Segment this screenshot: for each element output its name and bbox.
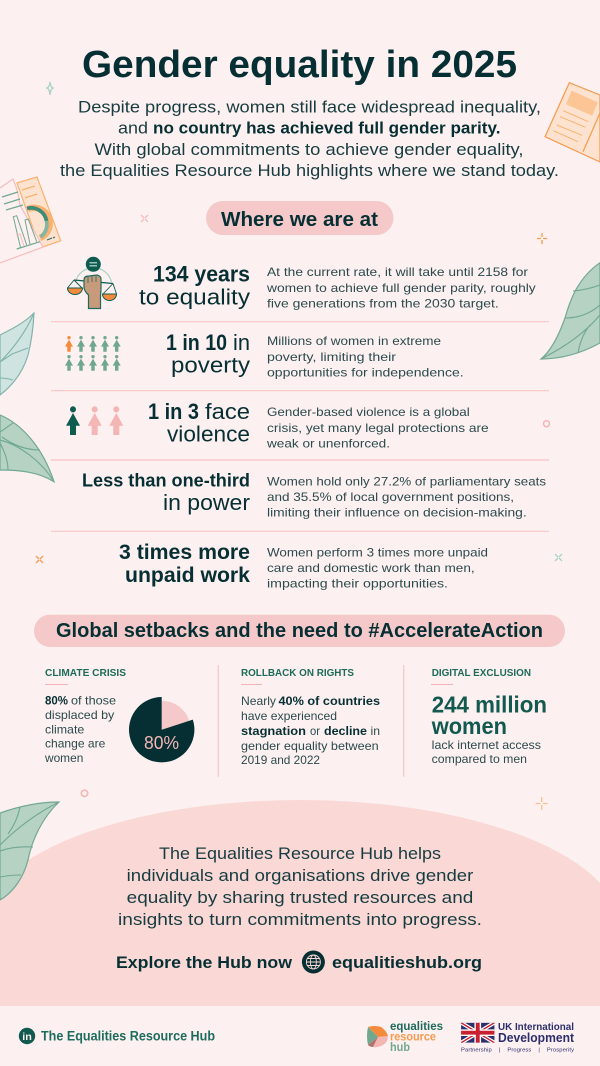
panel: 134 years <box>68 257 536 311</box>
intro text <box>60 97 559 180</box>
logo: UK International Development: Partnership | Progress | Prosperity <box>461 1048 574 1054</box>
panel: digital exclusion <box>431 667 547 766</box>
description: Women hold only 27.2% of parliamentary seats <box>267 474 546 488</box>
description <box>267 545 488 591</box>
text block: stagnation <box>241 724 306 738</box>
stat text: in <box>233 330 250 355</box>
description: impacting their opportunities. <box>267 577 448 591</box>
big number: 244 million <box>432 691 547 717</box>
description: opportunities for independence. <box>267 366 464 380</box>
text block: change are <box>45 737 106 751</box>
pie chart: 80%: 80% <box>144 733 179 753</box>
description: Millions of women in extreme <box>267 334 441 348</box>
text block <box>44 694 116 765</box>
illustration: green leaf left <box>0 415 54 482</box>
big number <box>431 691 547 739</box>
description: At the current rate, it will take until 2158 for <box>267 265 528 279</box>
big number: women <box>431 713 507 739</box>
stat text: violence <box>167 422 250 447</box>
stat text: 3 times more <box>119 541 250 564</box>
description: weak or unenforced. <box>266 437 390 451</box>
illustration: green leaf right <box>541 263 600 359</box>
description: five generations from the 2030 target. <box>267 297 499 311</box>
text block: in <box>370 724 380 738</box>
intro text: With global commitments to achieve gender equality, <box>94 140 524 159</box>
illustration: open report <box>545 83 600 162</box>
icon: scales and fist <box>68 257 116 308</box>
text block: displaced by <box>45 708 114 722</box>
description: crisis, yet many legal protections are <box>267 421 489 435</box>
text block: decline <box>324 724 367 738</box>
explore the hub link <box>116 950 482 974</box>
text block: gender equality between <box>241 739 379 753</box>
text block: 40% of countries <box>278 694 380 708</box>
text block: or <box>310 724 320 738</box>
text block: have experienced <box>241 709 337 723</box>
logo: equalities resource hub <box>367 1021 443 1054</box>
intro text: the Equalities Resource Hub highlights where we stand today. <box>60 161 559 180</box>
column heading: DIGITAL EXCLUSION <box>432 667 531 679</box>
stat text: face <box>205 399 250 424</box>
text block: 2019 and 2022 <box>241 753 320 767</box>
explore the hub link: equalitieshub.org <box>332 953 482 972</box>
text block: lack internet access <box>432 738 541 752</box>
stat text <box>82 470 250 515</box>
heading: where we are at <box>206 201 394 235</box>
stat text: 1 in 3 <box>148 399 199 424</box>
description: poverty, limiting their <box>267 350 396 364</box>
description: women to achieve full gender parity, roughly <box>266 281 536 295</box>
panel: 1 in 3 face violence <box>66 399 489 451</box>
text block <box>241 694 380 767</box>
stat text: 134 years <box>153 262 250 287</box>
illustration: pale leaf left <box>0 313 34 395</box>
column heading: ROLLBACK ON RIGHTS <box>241 667 354 679</box>
stat text: poverty <box>171 353 250 378</box>
title: Gender equality in 2025 <box>82 44 517 86</box>
icon: union flag <box>461 1022 494 1043</box>
decorative sparkles <box>36 82 562 810</box>
text block: Nearly <box>241 694 276 708</box>
description: care and domestic work than men, <box>267 561 475 575</box>
call-to-action text: insights to turn commitments into progress. <box>118 910 482 929</box>
panel: 134 years: to equality <box>139 284 250 310</box>
logo: equalities resource hub: resource <box>390 1032 436 1044</box>
description <box>267 474 546 520</box>
call-to-action text <box>118 844 482 929</box>
description <box>267 334 464 380</box>
illustration: green leaf bottom left <box>0 802 59 900</box>
description: limiting their influence on decision-making. <box>267 506 527 520</box>
icon: ten women, one highlighted <box>65 336 121 371</box>
heading: global setbacks <box>34 615 565 647</box>
intro text: no country has achieved full gender parity. <box>153 119 500 138</box>
stat text: unpaid work <box>125 564 250 587</box>
description <box>266 405 489 451</box>
icon: globe <box>302 950 325 974</box>
description <box>266 265 536 311</box>
panel: climate crisis <box>44 667 194 765</box>
footer: linkedin: The Equalities Resource Hub <box>41 1029 215 1044</box>
illustration: chart document <box>0 177 61 263</box>
stat text: Less than one-third <box>82 470 250 491</box>
bottom call-to-action background <box>0 800 600 1006</box>
footer: linkedin: in <box>22 1032 32 1043</box>
column heading: CLIMATE CRISIS <box>45 667 126 679</box>
icon: three women, one highlighted <box>66 406 123 435</box>
text block: of those <box>71 694 116 708</box>
call-to-action text: individuals and organisations drive gender <box>127 866 474 885</box>
text block: climate <box>45 722 85 736</box>
logo: equalities resource hub: hub <box>390 1042 410 1054</box>
explore the hub link: Explore the Hub now <box>116 953 293 972</box>
description: Women perform 3 times more unpaid <box>267 545 488 559</box>
heading: where we are at: Where we are at <box>221 209 378 231</box>
call-to-action text: The Equalities Resource Hub helps <box>159 844 441 863</box>
stat text: in power <box>163 490 250 515</box>
description: and 35.5% of local government positions, <box>267 490 514 504</box>
stat text <box>148 399 250 447</box>
stat text: 1 in 10 <box>166 330 227 355</box>
pie chart: 80% <box>129 697 194 762</box>
text block: compared to men <box>432 752 527 766</box>
stat text <box>166 330 250 378</box>
panel: 3 times more unpaid work <box>119 541 488 591</box>
stat text <box>119 541 250 587</box>
panel: less than one-third in power <box>82 470 546 520</box>
heading: global setbacks: Global setbacks and the need to #AccelerateAction <box>56 620 543 642</box>
text block: 80% <box>45 694 68 708</box>
logo: equalities resource hub: equalities <box>390 1021 443 1033</box>
intro text: Despite progress, women still face widespread inequality, <box>78 97 541 116</box>
logo: UK International Development: Development <box>498 1030 575 1045</box>
logo: UK International Development: UK International <box>498 1021 574 1033</box>
logo: UK International Development <box>461 1021 575 1054</box>
text block <box>432 738 541 766</box>
text block: women <box>44 751 83 765</box>
panel: 1 in 10 in poverty <box>65 330 464 380</box>
intro text: and <box>118 119 148 138</box>
call-to-action text: equality by sharing trusted resources and <box>127 888 473 907</box>
panel: rollback on rights <box>241 667 380 767</box>
description: Gender-based violence is a global <box>267 405 470 419</box>
